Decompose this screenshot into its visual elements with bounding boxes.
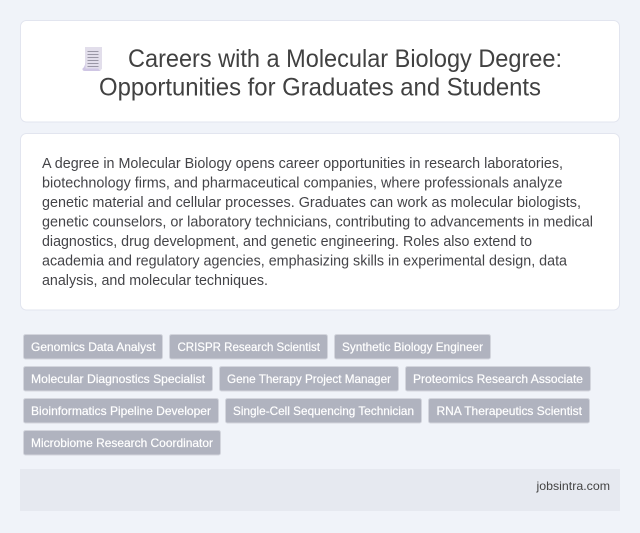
title: Opportunities for Graduates and Students (99, 74, 541, 102)
tag: Single-Cell Sequencing Technician: Single-Cell Sequencing Technician (233, 404, 414, 418)
description text (42, 155, 593, 289)
tag: CRISPR Research Scientist: CRISPR Research Scientist (178, 340, 321, 354)
description text: analysis, and molecular techniques. (42, 272, 268, 289)
career tags (24, 334, 590, 455)
tag: Synthetic Biology Engineer (334, 334, 490, 359)
tag: RNA Therapeutics Scientist (428, 398, 590, 423)
icon: document scroll (82, 47, 102, 71)
title (99, 45, 562, 102)
tag: Single-Cell Sequencing Technician (226, 398, 422, 423)
title: Careers with a Molecular Biology Degree: (128, 45, 562, 73)
description text: diagnostics, drug development, and genetic engineering. Roles also extend to (42, 233, 532, 250)
tag: Molecular Diagnostics Specialist (24, 366, 212, 391)
description text: biotechnology firms, and pharmaceutical companies, where professionals analyze (42, 174, 562, 192)
footer source: jobsintra.com (535, 479, 610, 493)
panel: title card (20, 20, 620, 122)
tag: CRISPR Research Scientist (170, 334, 328, 359)
description text: academia and regulatory agencies, emphasizing skills in experimental design, data (42, 252, 568, 270)
tag: Genomics Data Analyst: Genomics Data Analyst (31, 340, 156, 354)
tag: Proteomics Research Associate (406, 366, 590, 391)
description text: genetic material and cellular processes. Graduates can work as molecular biologists, (42, 194, 581, 211)
description text: genetic counselors, or laboratory technicians, contributing to advancements in medical (42, 214, 593, 230)
tag: Gene Therapy Project Manager (220, 366, 398, 391)
tag: Microbiome Research Coordinator: Microbiome Research Coordinator (31, 436, 213, 450)
tag: Synthetic Biology Engineer: Synthetic Biology Engineer (342, 340, 483, 354)
tag: Proteomics Research Associate: Proteomics Research Associate (413, 372, 583, 386)
tag: Microbiome Research Coordinator (24, 430, 220, 455)
tag: Genomics Data Analyst (24, 334, 162, 359)
description text: A degree in Molecular Biology opens career opportunities in research laboratories, (42, 155, 563, 172)
tag: Bioinformatics Pipeline Developer: Bioinformatics Pipeline Developer (31, 404, 211, 418)
tag: Molecular Diagnostics Specialist: Molecular Diagnostics Specialist (31, 372, 206, 386)
tag: RNA Therapeutics Scientist: RNA Therapeutics Scientist (436, 404, 583, 418)
tag: Gene Therapy Project Manager: Gene Therapy Project Manager (227, 372, 391, 386)
panel: description (20, 134, 620, 310)
tag: Bioinformatics Pipeline Developer (24, 398, 218, 423)
footer bar (20, 469, 620, 511)
